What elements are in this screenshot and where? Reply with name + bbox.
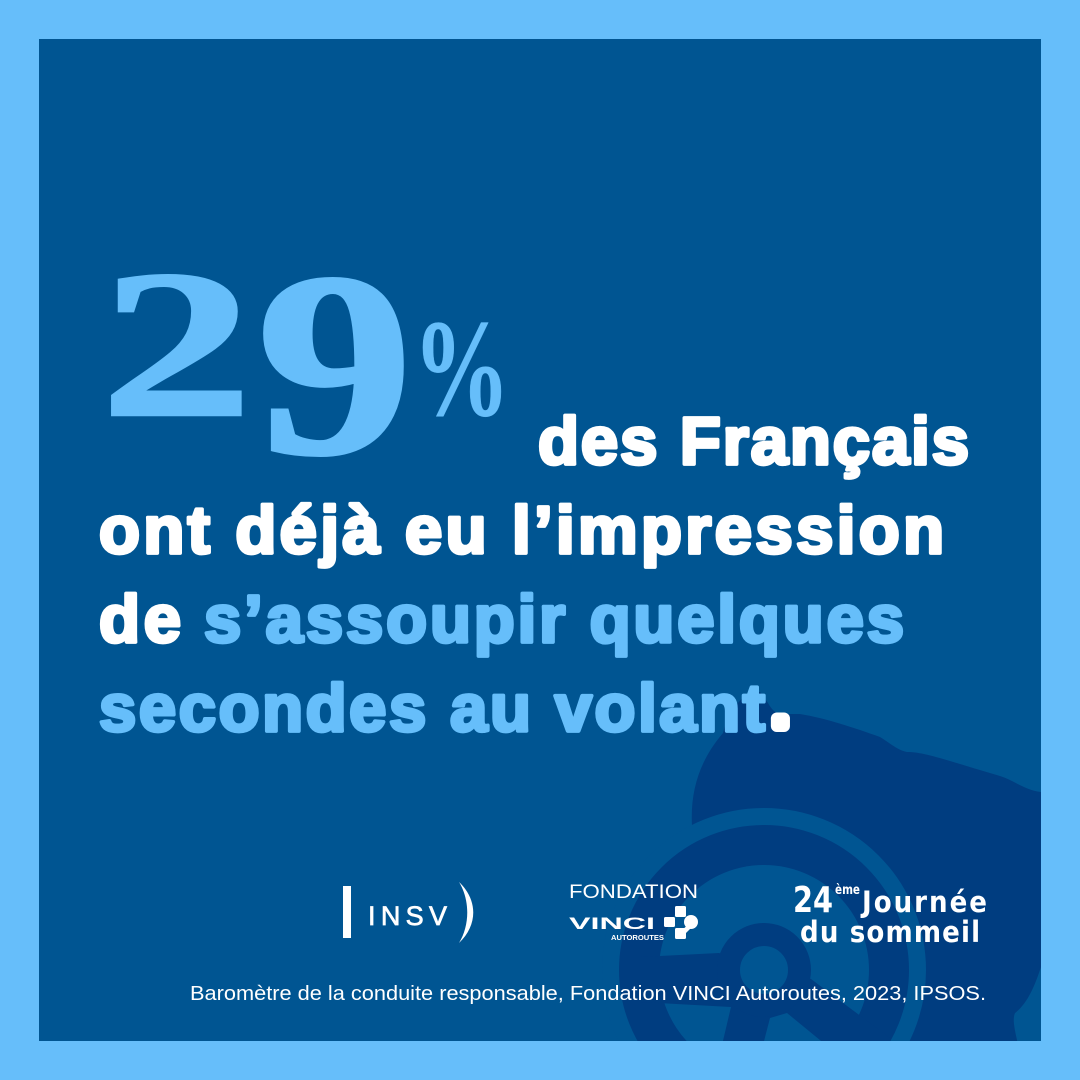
steering wheel inner disc: [660, 865, 869, 1041]
logo: 24ème Journée du sommeil: 24: [793, 880, 833, 921]
steering wheel spokes: [659, 953, 859, 1041]
steering wheel ring: [619, 808, 926, 1041]
headline: [99, 404, 969, 746]
logo: Fondation VINCI Autoroutes: VINCI: [569, 914, 655, 933]
headline line 2: ont déjà eu l’impression: [99, 493, 944, 568]
headline line 4: secondes au volant: [99, 671, 765, 746]
headline line 3: de: [99, 582, 181, 657]
logo: 24ème Journée du sommeil: [793, 880, 987, 949]
headline line 1: des Français: [538, 404, 969, 479]
source caption: Baromètre de la conduite responsable, Fondation VINCI Autoroutes, 2023, IPSOS.: [190, 982, 986, 1005]
logo: INSV: [343, 882, 473, 943]
icon: VINCI squares: [664, 906, 698, 939]
logo: 24ème Journée du sommeil: ème: [835, 883, 860, 898]
logo: Fondation VINCI Autoroutes: FONDATION: [569, 882, 698, 903]
digit 9: 9: [257, 220, 413, 510]
logo: INSV: INSV: [368, 901, 447, 931]
digit 2: 2: [100, 227, 253, 461]
steering wheel hub: [728, 934, 800, 1006]
big number 29 percent: [100, 220, 510, 510]
percent sign: %: [413, 291, 510, 445]
headline line 3: s’assoupir quelques: [204, 582, 904, 657]
logo: 24ème Journée du sommeil: du sommeil: [800, 915, 980, 949]
logo: Fondation VINCI Autoroutes: [569, 882, 698, 942]
icon: sleeping driver with steering wheel: [619, 692, 1041, 1041]
logo: Fondation VINCI Autoroutes: AUTOROUTES: [611, 933, 664, 942]
logo: 24ème Journée du sommeil: Journée: [860, 885, 987, 919]
headline line 4: .: [774, 681, 787, 737]
